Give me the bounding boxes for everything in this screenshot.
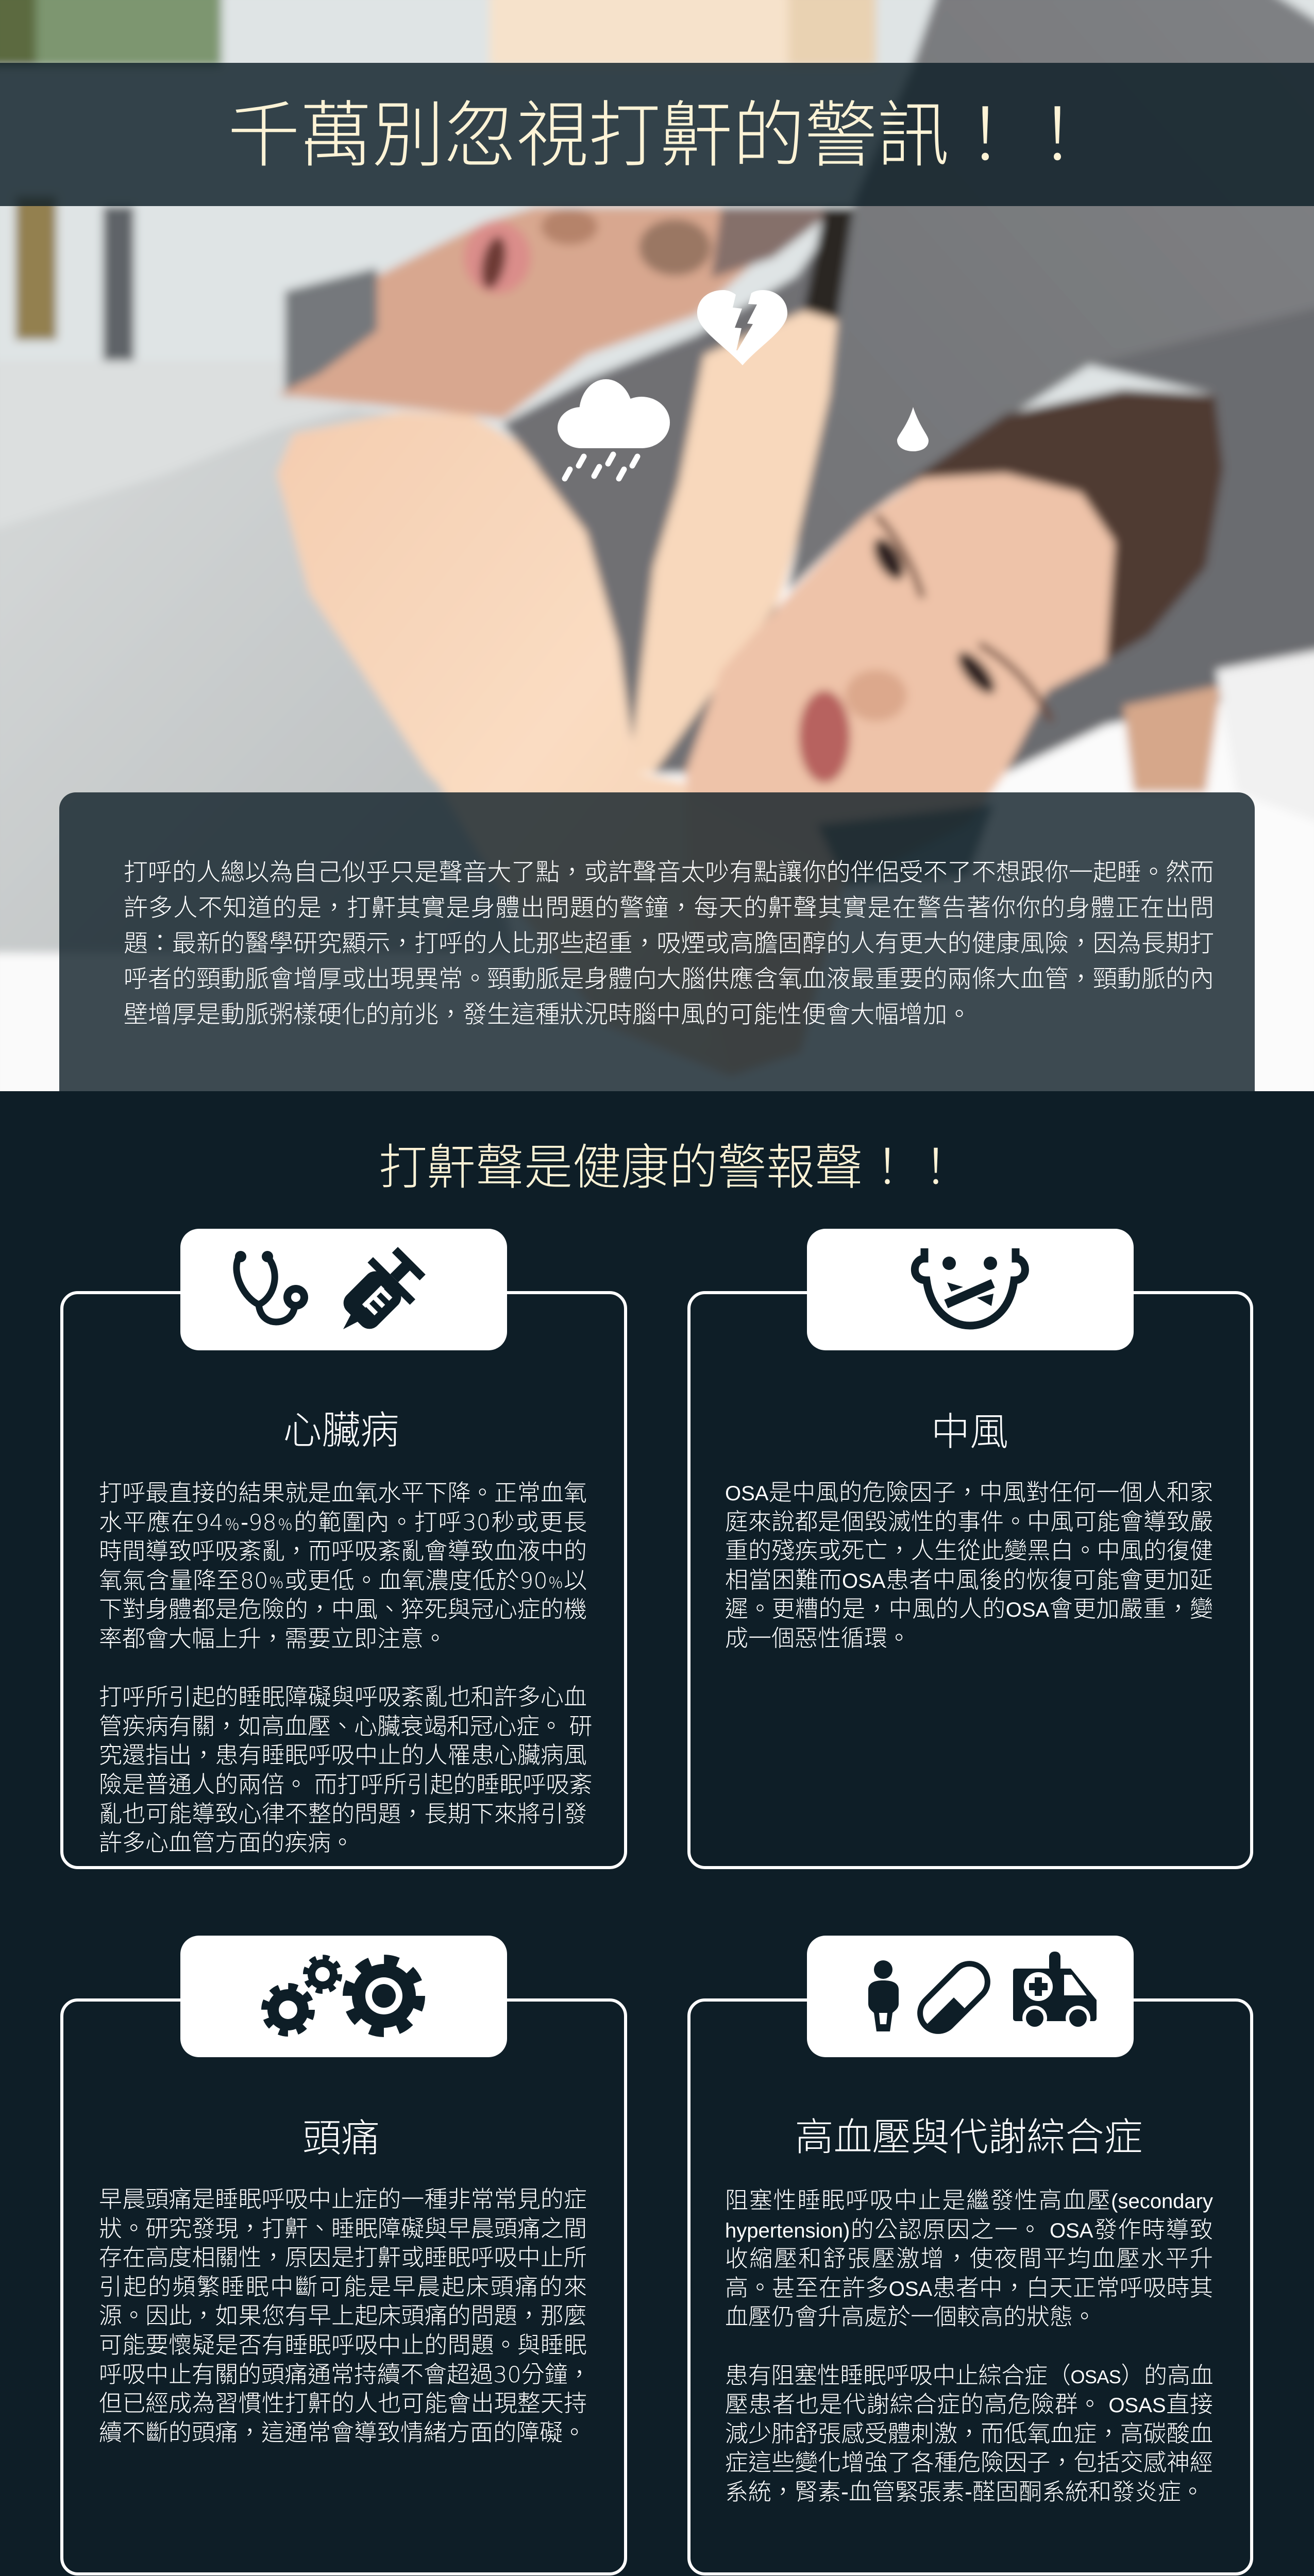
icon: broken heart bbox=[697, 290, 787, 365]
card text: 許多心血管方面的疾病。 bbox=[99, 1829, 354, 1856]
card text: 但已經成為習慣性打鼾的人也可能會出現整天持 bbox=[99, 2390, 587, 2416]
card text: 源。因此，如果您有早上起床頭痛的問題，那麼 bbox=[99, 2302, 587, 2329]
card text: 打呼最直接的結果就是血氧水平下降。正常血氧 bbox=[99, 1480, 587, 1506]
card text: 系統，腎素-血管緊張素-醛固酮系統和發炎症。 bbox=[725, 2479, 1204, 2505]
intro paragraph: 題：最新的醫學研究顯示，打呼的人比那些超重，吸煙或高膽固醇的人有更大的健康風險，因為長期打 bbox=[124, 929, 1214, 957]
icon tab: stethoscope and syringe bbox=[180, 1229, 507, 1350]
intro paragraph: 壁增厚是動脈粥樣硬化的前兆，發生這種狀況時腦中風的可能性便會大幅增加。 bbox=[124, 1001, 971, 1028]
card text: OSA是中風的危險因子，中風對任何一個人和家 bbox=[725, 1479, 1213, 1505]
intro paragraph: 呼者的頸動脈會增厚或出現異常。頸動脈是身體向大腦供應含氧血液最重要的兩條大血管，頸動脈的內 bbox=[124, 965, 1214, 992]
main title: 千萬別忽視打鼾的警訊！！ bbox=[228, 95, 1093, 176]
intro paragraph: 打呼的人總以為自己似乎只是聲音大了點，或許聲音太吵有點讓你的伴侶受不了不想跟你一起睡。然而 bbox=[124, 858, 1214, 886]
card text: 下對身體都是危險的，中風、猝死與冠心症的機 bbox=[99, 1596, 587, 1622]
card text: 遲。更糟的是，中風的人的OSA會更加嚴重，變 bbox=[725, 1596, 1213, 1622]
card heading: 頭痛 bbox=[302, 2116, 380, 2160]
card heading: 高血壓與代謝綜合症 bbox=[795, 2115, 1143, 2159]
card text: 庭來說都是個毀滅性的事件。中風可能會導致嚴 bbox=[725, 1509, 1213, 1535]
card text: 重的殘疾或死亡，人生從此變黑白。中風的復健 bbox=[725, 1537, 1213, 1564]
title band bbox=[0, 63, 1314, 206]
card text: 水平應在94％-98％的範圍內。打呼30秒或更長 bbox=[99, 1509, 587, 1536]
card text: 續不斷的頭痛，這通常會導致情緒方面的障礙。 bbox=[99, 2419, 586, 2446]
icon tab: gears bbox=[180, 1936, 507, 2057]
panel: hypertension and metabolic syndrome bbox=[687, 1936, 1253, 2575]
icon: cloud with rain bbox=[558, 379, 670, 479]
card text: 狀。研究發現，打鼾、睡眠障礙與早晨頭痛之間 bbox=[99, 2215, 587, 2242]
hero photo: couple in bed, woman covering ears with a pillow bbox=[0, 0, 1314, 1091]
panel: heart disease bbox=[60, 1229, 627, 1869]
intro panel bbox=[59, 792, 1255, 1091]
card text: 引起的頻繁睡眠中斷可能是早晨起床頭痛的來 bbox=[99, 2274, 587, 2300]
card heading: 心臟病 bbox=[283, 1409, 399, 1452]
card text: 存在高度相關性，原因是打鼾或睡眠呼吸中止所 bbox=[99, 2244, 587, 2270]
card text: 高。甚至在許多OSA患者中，白天正常呼吸時其 bbox=[725, 2275, 1213, 2301]
card text: 壓患者也是代謝綜合症的高危險群。 OSAS直接 bbox=[725, 2391, 1213, 2417]
card text bbox=[99, 1480, 593, 1856]
card text: 減少肺舒張感受體刺激，而低氧血症，高碳酸血 bbox=[725, 2420, 1213, 2447]
panel: stroke bbox=[687, 1229, 1253, 1869]
card text: 時間導致呼吸紊亂，而呼吸紊亂會導致血液中的 bbox=[99, 1538, 587, 1564]
card text: 早晨頭痛是睡眠呼吸中止症的一種非常常見的症 bbox=[99, 2186, 587, 2212]
panel: headache bbox=[60, 1936, 627, 2575]
section heading: 打鼾聲是健康的警報聲！！ bbox=[379, 1140, 960, 1194]
card text: 症這些變化增強了各種危險因子，包括交感神經 bbox=[725, 2449, 1213, 2476]
card text: 血壓仍會升高處於一個較高的狀態。 bbox=[725, 2303, 1096, 2330]
card text bbox=[725, 1479, 1213, 1651]
intro paragraph bbox=[124, 858, 1214, 1028]
card heading: 中風 bbox=[931, 1410, 1008, 1453]
card text: 打呼所引起的睡眠障礙與呼吸紊亂也和許多心血 bbox=[99, 1684, 587, 1710]
icon: tear drop bbox=[897, 407, 929, 451]
card text: 率都會大幅上升，需要立即注意。 bbox=[99, 1625, 447, 1652]
icon tab: taped mouth face bbox=[807, 1229, 1134, 1350]
card text: 呼吸中止有關的頭痛通常持續不會超過30分鐘， bbox=[99, 2361, 591, 2388]
card text bbox=[725, 2187, 1213, 2505]
card text: 阻塞性睡眠呼吸中止是繼發性高血壓(secondary bbox=[725, 2187, 1213, 2213]
card text: 收縮壓和舒張壓激增，使夜間平均血壓水平升 bbox=[725, 2245, 1213, 2272]
card text: hypertension)的公認原因之一。 OSA發作時導致 bbox=[725, 2216, 1213, 2243]
icon tab: person, pill, ambulance bbox=[807, 1936, 1134, 2057]
card text: 亂也可能導致心律不整的問題，長期下來將引發 bbox=[99, 1801, 587, 1827]
card text: 患有阻塞性睡眠呼吸中止綜合症（OSAS）的高血 bbox=[725, 2362, 1213, 2388]
card text bbox=[99, 2186, 591, 2446]
card text: 成一個惡性循環。 bbox=[725, 1625, 911, 1651]
card text: 相當困難而OSA患者中風後的恢復可能會更加延 bbox=[725, 1567, 1213, 1593]
card text: 究還指出，患有睡眠呼吸中止的人罹患心臟病風 bbox=[99, 1742, 587, 1768]
card text: 管疾病有關，如高血壓、心臟衰竭和冠心症。 研 bbox=[99, 1713, 593, 1739]
card text: 險是普通人的兩倍。 而打呼所引起的睡眠呼吸紊 bbox=[99, 1771, 593, 1798]
intro paragraph: 許多人不知道的是，打鼾其實是身體出問題的警鐘，每天的鼾聲其實是在警告著你你的身體正在出問 bbox=[124, 894, 1214, 921]
card text: 氧氣含量降至80％或更低。血氧濃度低於90％以 bbox=[99, 1567, 587, 1594]
card text: 可能要懷疑是否有睡眠呼吸中止的問題。與睡眠 bbox=[99, 2332, 587, 2358]
